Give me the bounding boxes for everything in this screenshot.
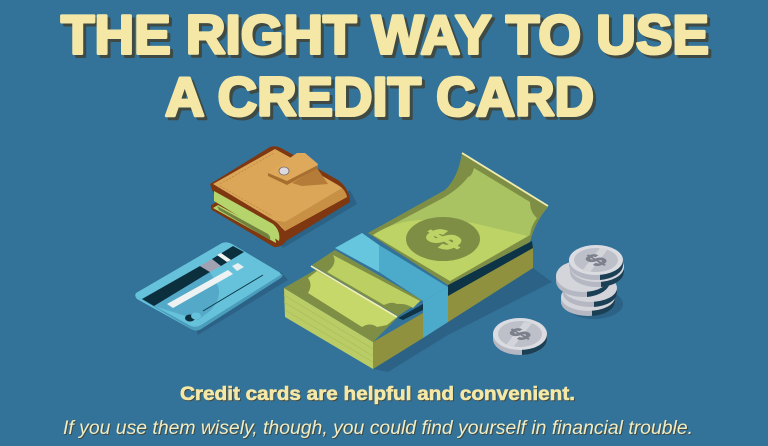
signature panel [167,270,233,308]
dollar seal [406,217,480,261]
title: A CREDIT CARD [168,68,597,130]
upper bill flap [312,250,422,316]
paper band [335,233,379,272]
front face [284,288,373,369]
icon: coin stack [556,245,624,319]
icon: coin stack: $ [579,250,614,271]
title [61,4,712,130]
icon: money stack [284,153,552,372]
title: A CREDIT CARD [165,66,594,128]
lower bill [284,269,398,342]
subheading: Credit cards are helpful and convenient. [181,385,576,406]
icon: credit card [135,242,288,335]
caption: If you use them wisely, though, you could find yourself in financial trouble. [64,419,694,440]
title: THE RIGHT WAY TO USE [61,4,709,66]
caption: If you use them wisely, though, you could find yourself in financial trouble. [63,418,693,439]
title: THE RIGHT WAY TO USE [64,6,712,68]
curved top bill [368,153,548,285]
subheading: Credit cards are helpful and convenient. [180,384,575,405]
icon: single silver coin [493,318,547,355]
icon: wallet [210,146,357,248]
wallet clasp [268,153,318,184]
magnetic stripe [142,266,210,306]
icon: single silver coin: $ [503,324,538,345]
side faces [373,313,423,369]
icon: money stack: $ [416,223,473,257]
